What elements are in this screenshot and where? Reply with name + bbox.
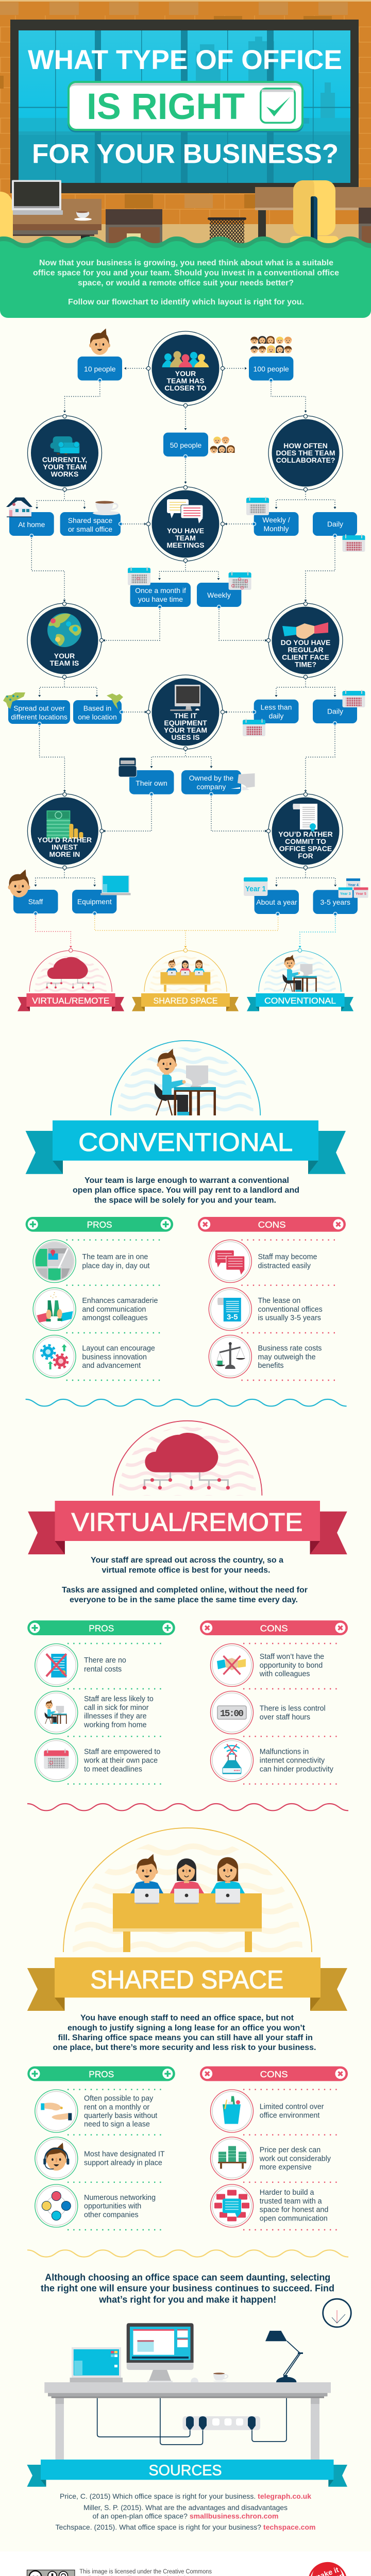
icon: year 1 calendar: Year 1 (245, 885, 266, 893)
con: price per desk (210, 2137, 331, 2180)
node: your team has closer to: CLOSER TO (164, 384, 207, 392)
pro: less sick days: call in sick for minor (84, 1704, 149, 1712)
box: less than daily: Less than (261, 703, 292, 711)
con: business rates: Business rate costs (258, 1345, 322, 1353)
cons header (200, 2066, 348, 2081)
connector arrowheads (34, 367, 336, 948)
window with skyline (19, 30, 350, 183)
icon: calendar (243, 719, 265, 736)
icon: red calendar (342, 534, 365, 552)
node: currently your team works: CURRENTLY, (42, 455, 87, 464)
box: daily: Daily (327, 520, 343, 528)
con: limited control: office environment (260, 2111, 319, 2120)
box: daily: Daily (327, 707, 343, 715)
icon: calendar (44, 1749, 69, 1769)
box: spread out: Spread out over (13, 704, 65, 712)
outcome: shared space (132, 948, 239, 1011)
description text (73, 1176, 299, 1205)
node: commit to office space (266, 792, 343, 870)
node: IT equipment: EQUIPMENT (164, 719, 207, 727)
title pill: is right (68, 81, 303, 132)
box: weekly (197, 583, 241, 608)
con: lease length (209, 1288, 323, 1330)
window frame (10, 20, 359, 193)
con: business rates: benefits (258, 1362, 284, 1370)
box: weekly: Weekly (207, 591, 231, 599)
icon: light monitor (231, 773, 255, 790)
box: once a month: Once a month if (135, 586, 186, 595)
intro text: Now that your business is growing, you need think about what is a suitable (39, 259, 333, 267)
icon: desk lamp (265, 2331, 303, 2382)
con: distracted: distracted easily (258, 1262, 311, 1270)
outcome: conventional (247, 948, 353, 1011)
node: you have team meetings: MEETINGS (166, 541, 205, 549)
con: trust: open communication (260, 2214, 328, 2223)
panel: footer (0, 2551, 371, 2576)
box: at home: At home (18, 520, 45, 529)
description text: Your team is large enough to warrant a conventional (85, 1176, 289, 1185)
node: your team is (27, 602, 104, 679)
icon: scales (215, 1342, 245, 1369)
banner: conventional (26, 1121, 346, 1174)
icon: money on desk (218, 2146, 246, 2169)
con: business rates (209, 1335, 322, 1378)
icon: hands exchanging coin (41, 2103, 72, 2121)
cons header (198, 1217, 346, 1232)
pro: IT support (35, 2137, 165, 2180)
conclusion text: what’s right for you and make it happen! (98, 2294, 276, 2304)
description text: Tasks are assigned and completed online, without the need for (62, 1586, 308, 1595)
con: staff hours (210, 1691, 326, 1734)
box: spread out: different locations (11, 713, 68, 721)
pro: one place (33, 1240, 150, 1283)
pro: innovation (33, 1335, 155, 1378)
node: your team has closer to: TEAM HAS (166, 377, 205, 385)
pro: innovation: business innovation (82, 1353, 147, 1361)
banner: shared space (27, 1957, 347, 2011)
icon: digital clock: 15:00 (220, 1709, 244, 1719)
pro: camaraderie: Enhances camaraderie (82, 1297, 158, 1305)
pros header (27, 1620, 175, 1635)
outcome: conventional: CONVENTIONAL (264, 996, 336, 1006)
node: commit to office space: COMMIT TO (285, 837, 326, 845)
box: weekly monthly (252, 512, 299, 536)
filing cabinet (106, 209, 162, 245)
description text: everyone to be in the same place the same time every day. (70, 1596, 298, 1604)
box: 10 people (78, 357, 122, 382)
icon: year calendars (339, 878, 368, 898)
description text: You have enough staff to need an office space, but not (80, 2014, 294, 2023)
icon: armchair (50, 436, 79, 454)
icon: laptop (70, 2347, 123, 2382)
pro: one place: The team are in one (82, 1253, 148, 1261)
box: less than daily: daily (269, 712, 283, 720)
con: business rates: may outweigh the (258, 1353, 316, 1361)
illustration: person at desk under dome (111, 1041, 260, 1115)
illustration: desk (44, 2323, 331, 2460)
logo: make it cheaper (309, 2562, 346, 2576)
icon: ten small faces (250, 336, 292, 353)
node: invest more in: YOU’D RATHER (38, 836, 92, 844)
box: their own (129, 770, 174, 796)
node: you have team meetings (146, 485, 225, 563)
node: client face time (266, 602, 343, 679)
icon: tablet in sleeve (119, 758, 137, 777)
icon: laptop (100, 875, 131, 895)
box: daily (313, 512, 357, 537)
icon: speech bubbles (167, 499, 203, 523)
icon: map (35, 1242, 74, 1281)
description text: the space will be solely for you and your team. (94, 1196, 276, 1205)
pros header (26, 1217, 173, 1232)
outcome: virtual remote: VIRTUAL/REMOTE (32, 996, 109, 1006)
pro: monthly rent: need to sign a lease (84, 2121, 150, 2129)
box: shared space or small office (60, 512, 122, 536)
node: IT equipment: USES IS (171, 733, 200, 741)
icon: network nodes (42, 2192, 71, 2221)
icon: red calendar (342, 690, 365, 707)
waste bin (208, 217, 246, 245)
intro text: Follow our flowchart to identify which layout is right for you. (68, 298, 304, 307)
box: once a month: you have time (138, 595, 183, 603)
left desk with laptop and cup (0, 180, 102, 242)
icon: calendar one marked (128, 567, 150, 585)
box: 3-5 years (313, 890, 358, 916)
pro: own pace: Staff are empowered to (84, 1748, 160, 1756)
con: staff hours: There is less control (260, 1704, 326, 1713)
pro: one place: place day in, day out (82, 1262, 150, 1270)
box: shared space or small office: or small office (68, 525, 112, 533)
pro: camaraderie: amongst colleagues (82, 1314, 148, 1323)
node: your team has closer to: YOUR (175, 369, 196, 378)
node: how often does the team collaborate: DOES THE TEAM (276, 449, 335, 457)
icon: five faces (210, 437, 235, 453)
box: once a month (130, 583, 191, 608)
box: 100 people (249, 357, 293, 382)
node: client face time: REGULAR (288, 646, 324, 654)
box: 50 people: 50 people (170, 441, 201, 449)
description text: enough to justify signing a long lease for an office you won’t (68, 2024, 306, 2032)
con: limited control (210, 2090, 324, 2132)
pro: networking: other companies (84, 2211, 139, 2219)
box: owned by the company (181, 770, 241, 796)
creative commons badge (27, 2570, 75, 2576)
node: you have team meetings: TEAM (175, 534, 196, 542)
node: commit to office space: YOU’D RATHER (278, 830, 333, 838)
con: connectivity (210, 1739, 334, 1782)
outcome: shared space: SHARED SPACE (154, 996, 217, 1006)
icon: router (223, 1744, 241, 1774)
box: based in one location: Based in (83, 704, 111, 712)
icon: mouse (191, 2378, 198, 2382)
pro: monthly rent: Often possible to pay (84, 2094, 154, 2103)
icon: calendar (246, 497, 269, 515)
node: IT equipment: YOUR TEAM (164, 726, 207, 734)
node: you have team meetings: YOU HAVE (167, 527, 204, 535)
node: how often does the team collaborate: HOW OFTEN (283, 442, 328, 450)
icon: desk tidy (223, 2096, 241, 2124)
pro: camaraderie (33, 1288, 158, 1330)
panel: shared space section (27, 1828, 348, 2230)
description text: open plan office space. You will pay rent to a landlord and (73, 1186, 299, 1195)
intro text (33, 259, 339, 307)
license text: This image is licensed under the Creative Commons (79, 2569, 212, 2575)
box: about a year: About a year (256, 898, 297, 906)
icon: desktop monitor (127, 2323, 194, 2382)
pro: own pace: work at their own pace (83, 1757, 158, 1765)
conclusion text: the right one will ensure your business continues to succeed. Find (41, 2283, 334, 2294)
icon: gears (41, 1344, 68, 1369)
description text: Your staff are spread out across the country, so a (91, 1556, 283, 1565)
node: client face time: DO YOU HAVE (281, 638, 330, 647)
icon: wall clock (323, 2299, 351, 2327)
icon: world map (3, 692, 25, 709)
con: trust (210, 2184, 328, 2227)
pro: less sick days: Staff are less likely to (84, 1695, 154, 1703)
banner: sources (27, 2460, 347, 2487)
cons header (200, 1620, 348, 1635)
box: staff: Staff (28, 897, 43, 906)
icon: single face (89, 329, 110, 355)
icon: team busts (162, 351, 209, 367)
icon: speech bubble among swearing bubbles (214, 2190, 249, 2222)
node: client face time: CLIENT FACE (282, 653, 329, 662)
panel: flowchart (3, 329, 368, 1011)
node: commit to office space: FOR (298, 852, 313, 860)
description text: virtual remote office is best for your needs. (102, 1566, 270, 1575)
title pill: is right: IS RIGHT (87, 87, 245, 127)
pro: no rental (35, 1643, 126, 1687)
box: 10 people: 10 people (84, 365, 116, 373)
source list (56, 2492, 315, 2531)
box: weekly monthly: Monthly (263, 524, 289, 533)
banner: shared space: SHARED SPACE (90, 1965, 283, 1994)
con: price per desk: more expensive (260, 2163, 312, 2172)
icon: handshake (282, 622, 328, 639)
pros header (27, 2066, 175, 2081)
icon: calendar weekly marks (229, 571, 251, 590)
node: how often does the team collaborate (268, 414, 343, 492)
title line 1: WHAT TYPE OF OFFICE (28, 45, 342, 75)
con: trust: space for honest and (260, 2206, 328, 2214)
pro: own pace (35, 1739, 160, 1782)
source list: Price, C. (2015) Which office space is right for your business. telegraph.co.uk (60, 2492, 311, 2500)
pro: innovation: and advancement (82, 1362, 141, 1370)
con: lease length: is usually 3-5 years (258, 1314, 321, 1323)
icon: headset face (43, 2143, 69, 2171)
con: price per desk: Price per desk can (260, 2146, 321, 2154)
con: trust: Harder to build a (260, 2189, 314, 2197)
outcome: virtual remote (18, 948, 124, 1011)
icon: coffee cup (93, 501, 120, 515)
node: client face time: TIME? (295, 660, 316, 669)
icon: lease document: 3-5 (227, 1313, 238, 1321)
box: equipment (72, 890, 116, 915)
banner: virtual remote: VIRTUAL/REMOTE (71, 1508, 303, 1537)
box: shared space or small office: Shared space (68, 516, 112, 524)
pro: monthly rent (35, 2090, 157, 2132)
intro text: space, or would a remote office suit your needs better? (78, 279, 294, 287)
box: less than daily (252, 700, 299, 723)
description text (62, 1556, 308, 1604)
icon: house (6, 498, 32, 517)
box: at home (9, 512, 54, 537)
con: no bonding: Staff won’t have the (260, 1653, 324, 1661)
pro: monthly rent: quarterly basis without (84, 2112, 157, 2120)
pro: monthly rent: rent on a monthly or (84, 2103, 149, 2111)
source list: of an open-plan office space? smallbusiness.chron.com (93, 2512, 278, 2520)
pro: networking (35, 2184, 156, 2227)
con: distracted (209, 1240, 317, 1283)
con: connectivity: Malfunctions in (260, 1748, 309, 1756)
box: their own: Their own (136, 779, 167, 787)
source list: Techspace. (2015). What office space is right for your business? techspace.com (56, 2523, 315, 2531)
icon: money and coins (46, 810, 83, 839)
banner: virtual remote (28, 1501, 347, 1554)
con: limited control: Limited control over (260, 2103, 324, 2111)
pro: less sick days: illnesses if they are (84, 1713, 147, 1721)
illustration: cloud network under dome (113, 1421, 262, 1496)
box: 3-5 years: 3-5 years (321, 898, 350, 906)
panel: sources (27, 2460, 347, 2531)
panel: header office scene and title (0, 0, 371, 318)
icon: contract scroll (293, 804, 317, 832)
intro text: office space for you and your team. Should you invest in a conventional office (33, 269, 339, 277)
icon: year 1 calendar (244, 877, 267, 896)
pro: IT support: support already in place (84, 2159, 162, 2167)
con: connectivity: can hinder productivity (260, 1765, 334, 1773)
box: staff (13, 890, 58, 915)
icon: year calendars: Year 4 (348, 884, 359, 887)
conclusion text (41, 2273, 334, 2304)
con: trust: trusted team with a (260, 2197, 322, 2206)
conclusion text: Although choosing an office space can seem daunting, selecting (45, 2273, 330, 2283)
description text: one place, but there’s more security and less risk to your business. (53, 2043, 316, 2052)
pro: networking: opportunities with (84, 2202, 141, 2211)
title line 3: FOR YOUR BUSINESS? (32, 139, 339, 169)
node: IT equipment: THE IT (174, 711, 197, 720)
pro: innovation: Layout can encourage (82, 1345, 155, 1353)
box: 100 people: 100 people (254, 365, 289, 373)
node: invest more in: MORE IN (49, 850, 80, 858)
box: about a year (255, 890, 299, 916)
illustration: three people at table under dome (63, 1828, 312, 1952)
node: invest more in (27, 792, 104, 870)
node: IT equipment (146, 675, 225, 751)
icon: person at home desk (45, 1700, 67, 1724)
box: daily (313, 700, 357, 725)
panel: green intro band (0, 236, 371, 318)
con: distracted: Staff may become (258, 1253, 317, 1261)
con: price per desk: work out considerably (259, 2155, 331, 2163)
flowchart connectors (31, 368, 335, 945)
node: how often does the team collaborate: COLLABORATE? (276, 456, 335, 464)
icon: year calendars: Year 3 (340, 892, 351, 896)
box: owned by the company: company (197, 783, 226, 791)
panel: virtual remote section (27, 1421, 348, 1784)
node: commit to office space: OFFICE SPACE (279, 844, 332, 853)
description text: fill. Sharing office space means you can still have all your staff in (58, 2033, 313, 2042)
box: based in one location: one location (78, 713, 117, 721)
icon: desktop computer (170, 685, 200, 711)
pro: IT support: Most have designated IT (84, 2150, 165, 2159)
banner: conventional: CONVENTIONAL (78, 1128, 293, 1157)
con: lease length: conventional offices (258, 1306, 323, 1314)
icon: staff face (8, 870, 30, 897)
panel: conventional section (26, 1041, 346, 1380)
con: connectivity: internet connectivity (260, 1757, 325, 1765)
box: weekly monthly: Weekly / (262, 516, 290, 524)
description text (53, 2014, 316, 2052)
node: currently your team works (28, 414, 102, 492)
icon: cables and power strip (97, 2398, 286, 2445)
pro: own pace: to meet deadlines (84, 1765, 142, 1773)
brick wall (0, 0, 371, 247)
box: owned by the company: Owned by the (189, 774, 233, 782)
node: currently your team works: WORKS (51, 470, 78, 478)
con: no bonding (210, 1643, 324, 1687)
box: based in one location (73, 700, 123, 724)
con: staff hours: over staff hours (260, 1713, 310, 1721)
right desk and chair (255, 180, 371, 246)
pro: no rental: There are no (84, 1656, 126, 1665)
icon: checkbox (260, 88, 296, 124)
panel: conclusion (41, 2273, 351, 2460)
pro: less sick days (35, 1691, 154, 1734)
pro: no rental: rental costs (84, 1665, 122, 1673)
node: invest more in: INVEST (52, 843, 78, 851)
con: lease length: The lease on (258, 1297, 300, 1305)
icon: coffee cup (213, 2372, 228, 2382)
pro: camaraderie: and communication (82, 1306, 146, 1314)
node: your team is: YOUR (54, 652, 75, 660)
source list: Miller, S. P. (2015). What are the advantages and disadvantages (83, 2503, 288, 2512)
node: your team has closer to (146, 331, 225, 408)
icon: north america map (107, 693, 123, 709)
pro: less sick days: working from home (83, 1721, 147, 1730)
icon: year calendars: Year 5 (356, 892, 366, 896)
icon: crossed handshake (217, 1656, 246, 1674)
pro: networking: Numerous networking (84, 2194, 156, 2202)
icon: red speech bubbles (215, 1250, 245, 1275)
con: no bonding: with colleagues (259, 1670, 310, 1679)
box: spread out (8, 700, 70, 725)
node: your team is: TEAM IS (50, 659, 79, 667)
con: no bonding: opportunity to bond (260, 1662, 323, 1670)
icon: crossed lease (46, 1654, 66, 1677)
icon: clinking bottles (37, 1292, 73, 1323)
icon: globe with pins (47, 613, 81, 647)
box: 50 people (163, 433, 208, 458)
box: equipment: Equipment (77, 897, 112, 906)
node: currently your team works: YOUR TEAM (43, 463, 87, 471)
banner: sources: SOURCES (148, 2462, 222, 2479)
